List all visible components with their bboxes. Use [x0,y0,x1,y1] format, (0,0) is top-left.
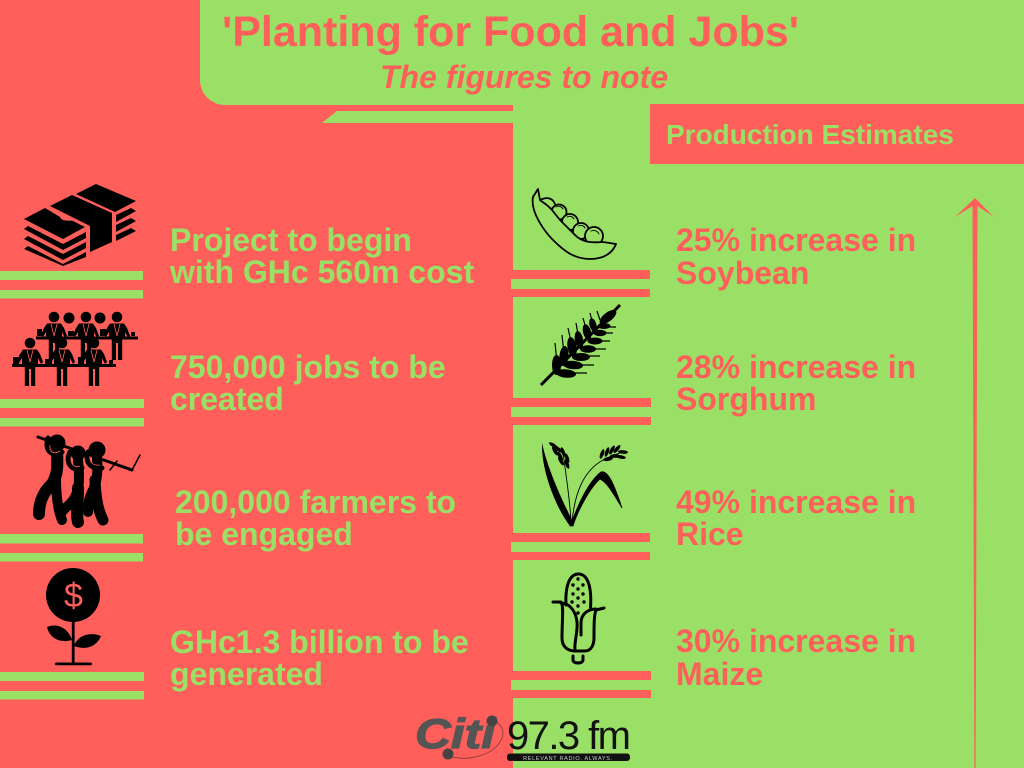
left text: farmers [175,484,456,552]
right column bars [511,270,651,698]
icon: pea pod [533,189,616,259]
logo: Citi 97.3 fm: RELEVANT RADIO. ALWAYS. [523,756,613,762]
production estimates header [650,104,1024,164]
left text: revenue: generated [170,656,323,692]
upward arrow [955,198,994,768]
left text: farmers: 200,000 farmers to [175,484,456,520]
icon: money stack [24,184,136,266]
left text: jobs [170,349,446,417]
icon: money plant [46,568,101,665]
right text: maize [676,623,916,692]
production estimates header: Production Estimates [666,119,954,150]
subtitle: The figures to note [380,59,668,95]
right text: rice [676,484,916,552]
banner accent stripe [322,111,514,123]
right text: sorghum: Sorghum [676,381,816,417]
left text: jobs: 750,000 jobs to be [170,349,446,385]
left column bars [0,271,144,700]
left text: revenue [170,624,469,692]
logo: Citi 97.3 fm [415,710,631,762]
left text: farmers: be engaged [175,516,353,552]
right text: sorghum: 28% increase in [676,349,916,385]
right text: soybean [676,222,916,291]
icon: workers [12,312,138,386]
logo: Citi 97.3 fm: 97.3 fm [507,714,631,758]
right text: maize: 30% increase in [676,623,916,659]
right text: rice: Rice [676,516,744,552]
left text: cost: with GHc 560m cost [169,254,474,290]
left text: cost: Project to begin [170,222,412,258]
icon: maize [553,574,604,663]
icon: farmers with hoes [38,434,140,522]
left text: cost [169,222,474,290]
left text: jobs: created [170,381,284,417]
title banner [200,0,1024,105]
left text: revenue: GHc1.3 billion to be [170,624,469,660]
right green panel [513,104,1024,768]
title: 'Planting for Food and Jobs' [222,8,799,56]
logo: Citi 97.3 fm: Citi [415,710,497,757]
right text: maize: Maize [676,656,763,692]
right text: rice: 49% increase in [676,484,916,520]
icon: sorghum [541,305,620,385]
icon: money plant: $ [64,577,83,615]
right text: soybean: Soybean [676,255,809,291]
right text: soybean: 25% increase in [676,222,916,258]
right text: sorghum [676,349,916,417]
icon: rice [542,441,628,526]
